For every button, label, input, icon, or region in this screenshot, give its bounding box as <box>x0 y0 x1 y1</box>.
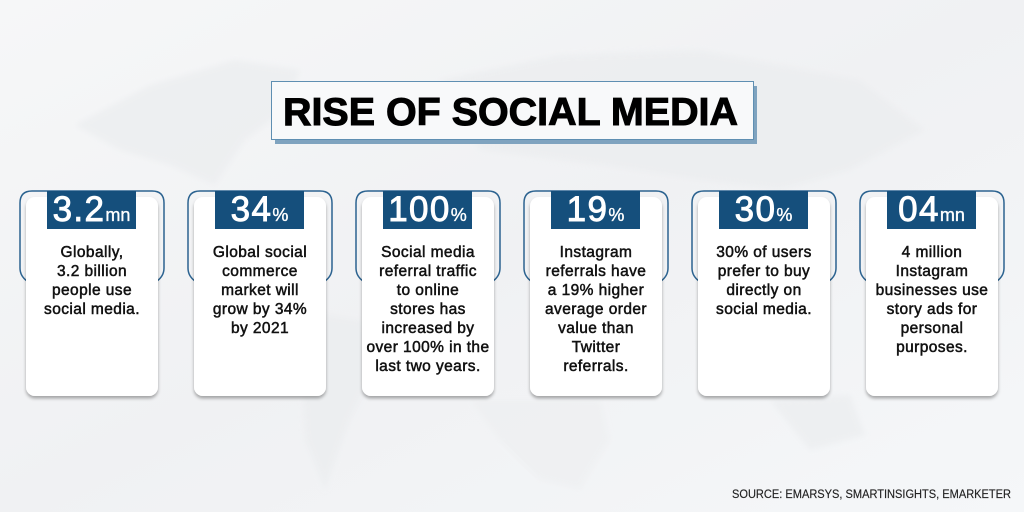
stat value: 34% <box>231 190 288 229</box>
description: commerce <box>222 263 298 280</box>
description: personal <box>901 320 963 337</box>
badge <box>551 191 640 229</box>
title box <box>272 82 757 144</box>
title: RISE OF SOCIAL MEDIA <box>283 91 738 134</box>
description: 30% of users <box>716 244 812 261</box>
card outline <box>20 191 164 281</box>
description: a 19% higher <box>548 282 644 299</box>
description: to online <box>397 282 459 299</box>
source note: SOURCE: EMARSYS, SMARTINSIGHTS, EMARKETER <box>732 489 1011 501</box>
badge <box>215 191 304 229</box>
card panel <box>530 197 662 396</box>
card panel <box>698 197 830 396</box>
description: referral traffic <box>379 263 477 280</box>
title box shadow <box>275 86 757 144</box>
card outline <box>860 191 1004 281</box>
description: prefer to buy <box>718 263 810 280</box>
title box frame <box>272 82 754 140</box>
description: Globally, <box>61 244 123 261</box>
card outline <box>188 191 332 281</box>
card 4: 19% <box>524 190 668 396</box>
description: Instagram <box>896 263 968 280</box>
badge <box>887 191 976 229</box>
card 1: 3.2mn <box>20 190 164 396</box>
description: story ads for <box>887 301 977 318</box>
description: purposes. <box>896 339 968 356</box>
description: over 100% in the <box>366 339 490 356</box>
stat value: 30% <box>735 190 792 229</box>
card 6: 04mn <box>860 190 1004 396</box>
badge <box>383 191 472 229</box>
description: referrals. <box>563 358 629 375</box>
description: by 2021 <box>231 320 289 337</box>
description: directly on <box>726 282 802 299</box>
description: referrals have <box>546 263 646 280</box>
description: market will <box>221 282 299 299</box>
card panel <box>26 197 158 396</box>
description: increased by <box>382 320 474 337</box>
stat value: 100% <box>388 190 467 229</box>
card 5: 30% <box>692 190 836 396</box>
card panel <box>866 197 998 396</box>
world map backdrop <box>75 50 925 490</box>
description: last two years. <box>375 358 481 375</box>
card 2: 34% <box>188 190 332 396</box>
description: Twitter <box>572 339 620 356</box>
card 3: 100% <box>356 190 500 396</box>
description: 4 million <box>902 244 962 261</box>
stat value: 19% <box>567 190 624 229</box>
description: Instagram <box>560 244 632 261</box>
card outline <box>524 191 668 281</box>
description: 3.2 billion <box>57 263 127 280</box>
stat value: 3.2mn <box>53 190 130 229</box>
description: Social media <box>381 244 475 261</box>
badge <box>47 191 136 229</box>
stat value: 04mn <box>898 190 965 229</box>
description: average order <box>545 301 647 318</box>
badge <box>719 191 808 229</box>
description: Global social <box>213 244 307 261</box>
description: stores has <box>390 301 466 318</box>
card outline <box>356 191 500 281</box>
description: social media. <box>44 301 140 318</box>
card outline <box>692 191 836 281</box>
description: people use <box>52 282 132 299</box>
card panel <box>362 197 494 396</box>
description: grow by 34% <box>213 301 307 318</box>
description: value than <box>558 320 634 337</box>
card panel <box>194 197 326 396</box>
description: social media. <box>716 301 812 318</box>
description: businesses use <box>876 282 988 299</box>
